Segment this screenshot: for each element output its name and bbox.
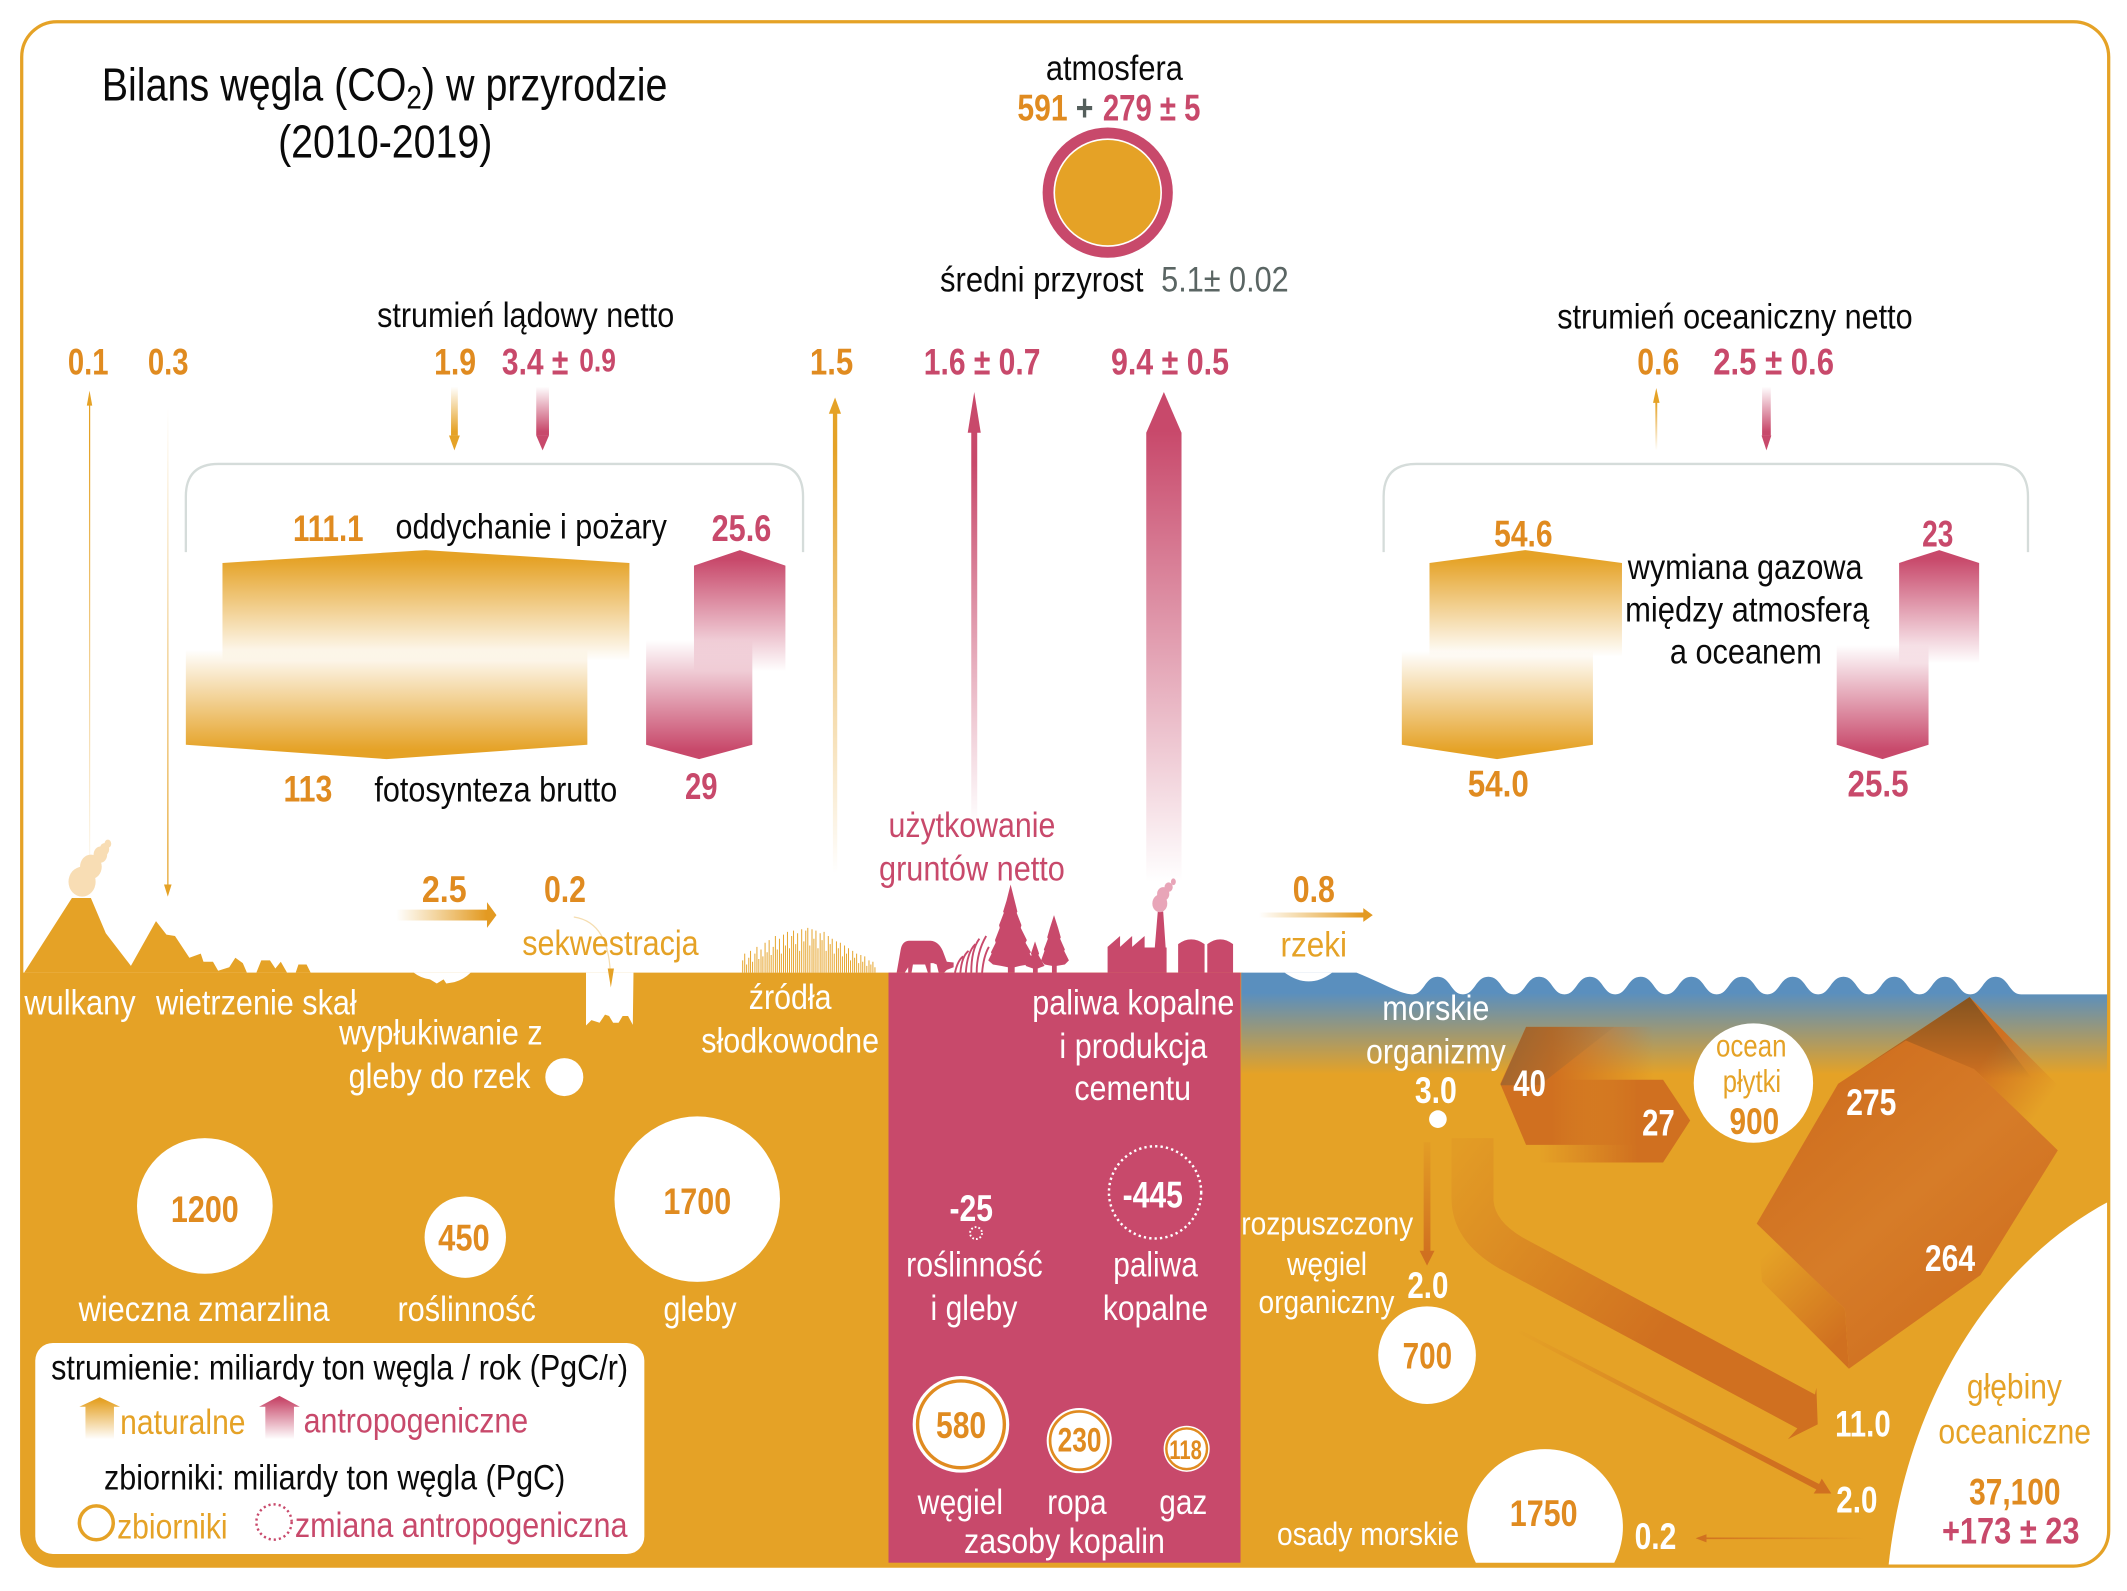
legend: antropogeniczne	[304, 1401, 528, 1440]
land surface labels: źródła	[749, 978, 832, 1017]
arrow: rivers 0.8	[1259, 908, 1373, 922]
legend: naturalne	[120, 1403, 246, 1442]
icon: volcano and mountains	[24, 840, 311, 973]
atmosphere-side land labels: użytkowanie	[889, 806, 1055, 845]
arrow: ocean release natural	[1402, 651, 1593, 759]
top flux numbers: 0.6	[1637, 341, 1679, 382]
reservoir: permafrost: wieczna zmarzlina	[78, 1290, 330, 1329]
reservoir: deep ocean labels: oceaniczne	[1938, 1412, 2091, 1451]
land block	[22, 973, 1243, 1567]
reservoir: permafrost: 1200	[171, 1189, 239, 1230]
atmosphere-side land labels: 0.8	[1293, 869, 1335, 910]
reservoir: dissolved organic carbon: 2.0	[1407, 1265, 1448, 1306]
atmosphere-side land labels: gruntów netto	[879, 849, 1065, 888]
reservoir: deep ocean labels: głębiny	[1967, 1368, 2062, 1407]
reservoir: shallow ocean: 900	[1730, 1101, 1779, 1142]
reservoir: coal: 580	[936, 1405, 986, 1446]
land exchange labels: fotosynteza brutto	[374, 771, 617, 810]
reservoir: marine sediments	[1277, 1449, 1623, 1563]
reservoir: deep ocean labels: +173 ± 23	[1942, 1511, 2080, 1552]
reservoir: vegetation	[397, 1196, 536, 1329]
land exchange labels	[284, 508, 771, 810]
ocean exchange labels: 23	[1922, 514, 1953, 555]
reservoir: marine sediments: osady morskie	[1277, 1516, 1459, 1552]
anthropogenic change: fossil fuels	[1103, 1146, 1208, 1328]
anthropogenic change: vegetation and soils: -25	[950, 1188, 993, 1229]
reservoir: marine sediments: 1750	[1510, 1493, 1578, 1534]
anthropogenic change: fossil fuels: kopalne	[1103, 1289, 1208, 1328]
land surface labels: gleby do rzek	[349, 1057, 531, 1096]
reservoir: gas: 118	[1169, 1434, 1202, 1465]
arrow: sediment burial 0.2	[1696, 1534, 1865, 1542]
arrow: ocean release anthropogenic	[1837, 645, 1929, 759]
arrow: shallow ocean to organisms 40	[1500, 1027, 1654, 1145]
marine organisms label and dot: morskie	[1382, 989, 1489, 1028]
marine organisms label and dot: 3.0	[1415, 1070, 1457, 1111]
ocean exchange labels: 25.5	[1848, 763, 1909, 804]
atmosphere reservoir: +	[1076, 88, 1093, 129]
marine organisms label and dot: organizmy	[1366, 1033, 1506, 1072]
title: ) w przyrodzie	[422, 58, 667, 110]
reservoir: dissolved organic carbon: węgiel	[1286, 1246, 1367, 1282]
top flux numbers: 1.6 ± 0.7	[924, 341, 1040, 382]
ocean flux numbers: 275	[1846, 1082, 1896, 1123]
icon: cow	[897, 941, 954, 973]
ocean exchange labels: 54.6	[1494, 514, 1553, 555]
anthropogenic change: vegetation and soils	[906, 1188, 1043, 1328]
anthropogenic change: vegetation and soils: i gleby	[931, 1289, 1018, 1328]
reservoir: soil leaching dot	[545, 1058, 583, 1096]
atmosphere-side land labels: rzeki	[1281, 925, 1347, 964]
top flux numbers: 1.5	[810, 341, 853, 382]
land surface labels: wypłukiwanie z	[338, 1014, 543, 1053]
arrow: respiration anthropogenic	[694, 550, 785, 671]
ocean flux numbers: 2.0	[1836, 1480, 1877, 1521]
atmosphere-side land labels: 2.5	[422, 869, 467, 910]
land exchange labels: oddychanie i pożary	[396, 508, 667, 547]
arrow: fossil fuels 9.4	[1146, 392, 1182, 882]
arrow: respiration natural	[222, 550, 629, 661]
atmosphere reservoir: 591	[1017, 88, 1068, 129]
ocean exchange labels: a oceanem	[1670, 632, 1822, 671]
top flux numbers: 0.1	[68, 341, 109, 382]
legend: zmiana antropogeniczna	[295, 1506, 628, 1545]
panel: surface reservoirs background	[22, 973, 2111, 1568]
reservoir: dissolved organic carbon: 700	[1403, 1336, 1452, 1377]
fossil panel labels: paliwa kopalne	[1032, 984, 1234, 1023]
legend	[35, 1343, 644, 1554]
ocean flux numbers: 11.0	[1835, 1404, 1891, 1445]
deep ocean reservoir	[1888, 1201, 2111, 1568]
ocean flux numbers: 27	[1642, 1102, 1675, 1143]
ocean flux numbers: 0.2	[1635, 1516, 1676, 1557]
arrow: ocean outgassing 0.6	[1653, 388, 1660, 450]
icon: large tree	[988, 884, 1034, 973]
top flux numbers: 9.4 ± 0.5	[1111, 341, 1229, 382]
reservoir: dissolved organic carbon: organiczny	[1259, 1284, 1395, 1320]
reservoir: dissolved organic carbon	[1241, 1205, 1476, 1404]
legend: zbiorniki: miliardy ton węgla (PgC)	[104, 1458, 565, 1497]
reservoir: shallow ocean: ocean	[1716, 1029, 1787, 1064]
anthropogenic change: vegetation and soils: roślinność	[906, 1245, 1043, 1284]
arrow: surface to deep ocean 264	[1757, 1040, 2058, 1369]
arrow: photosynthesis anthropogenic	[646, 640, 752, 759]
land surface labels: wulkany	[24, 984, 136, 1023]
reservoir: oil	[1047, 1408, 1112, 1522]
ocean exchange labels: 54.0	[1468, 763, 1529, 804]
icon: freshwater grass	[743, 928, 875, 973]
arrow: photosynthesis natural	[186, 650, 587, 759]
fossil panel labels: i produkcja	[1059, 1027, 1208, 1066]
reservoir: deep ocean labels: 37,100	[1969, 1471, 2061, 1512]
ocean exchange labels	[1468, 514, 1953, 804]
legend: zbiorniki	[117, 1507, 228, 1546]
panel: land exchange bracket	[186, 464, 803, 552]
top flux numbers	[68, 341, 1834, 382]
net land flux heading: strumień lądowy netto	[377, 296, 674, 335]
legend arrow: natural	[79, 1397, 120, 1439]
ocean flux numbers	[1513, 1063, 1976, 1557]
fossil panel labels	[1032, 984, 1234, 1108]
atmosphere reservoir: 5.1± 0.02	[1161, 261, 1289, 300]
anthropogenic change: fossil fuels: paliwa	[1113, 1245, 1198, 1284]
ocean exchange labels: między atmosferą	[1625, 590, 1870, 629]
icon: small tree	[1041, 915, 1069, 973]
icon: reeds	[955, 936, 989, 973]
reservoir: coal: węgiel	[917, 1483, 1003, 1522]
arrow: deep ocean to surface 275	[1838, 997, 2058, 1150]
arrow: land sink anthropogenic 3.4	[536, 387, 549, 450]
title: Bilans węgla (CO	[102, 58, 458, 110]
fossil panel labels: cementu	[1074, 1069, 1191, 1108]
arrow: freshwater outgassing 1.5	[829, 397, 841, 874]
reservoir: soils: gleby	[663, 1290, 737, 1329]
land exchange labels: 25.6	[712, 508, 771, 549]
top flux numbers: 3.4 ±	[502, 341, 568, 382]
reservoir: coal	[913, 1376, 1009, 1522]
title: 2	[406, 80, 422, 116]
reservoir: gas	[1159, 1426, 1210, 1522]
atmosphere reservoir: średni przyrost	[940, 261, 1144, 300]
reservoir: gas: gaz	[1159, 1483, 1207, 1522]
icon: silos	[1178, 939, 1233, 973]
atmosphere reservoir: 279 ± 5	[1103, 88, 1201, 129]
land exchange labels: 111.1	[293, 508, 364, 549]
land exchange labels: 29	[685, 766, 718, 807]
reservoir: permafrost	[78, 1138, 330, 1329]
top flux numbers: 0.9	[579, 343, 616, 379]
atmosphere reservoir: atmosfera	[1046, 49, 1183, 88]
arrow: ocean uptake anthropogenic	[1899, 550, 1979, 663]
atmosphere-side land labels	[422, 806, 1347, 964]
reservoir: soils	[614, 1116, 780, 1329]
arrow: land sink natural 1.9	[449, 387, 460, 450]
ocean block with waves	[1241, 973, 2111, 1568]
icon: tiny tree	[1026, 941, 1045, 973]
reservoir: oil: 230	[1058, 1421, 1101, 1459]
land surface labels	[24, 978, 879, 1096]
arrow: ocean uptake natural	[1429, 550, 1622, 657]
arrow: organisms to shallow ocean 27	[1538, 1080, 1690, 1163]
arrow: volcanoes 0.1	[87, 391, 92, 893]
arrow: organisms to DOC 2.0	[1420, 1142, 1435, 1266]
arrow: flux 2.0 to deep ocean	[1514, 1328, 1831, 1494]
title	[102, 58, 667, 167]
ocean flux numbers: 40	[1513, 1063, 1546, 1104]
land exchange labels: 113	[284, 769, 332, 810]
top flux numbers: 1.9	[434, 341, 476, 382]
top flux numbers: 2.5 ± 0.6	[1713, 341, 1834, 382]
land surface labels: wietrzenie skał	[155, 984, 357, 1023]
reservoir: dissolved organic carbon: rozpuszczony	[1241, 1205, 1414, 1241]
ocean flux numbers: 264	[1925, 1238, 1976, 1279]
legend arrow: anthropogenic	[259, 1396, 300, 1439]
reservoir: vegetation: 450	[438, 1218, 490, 1259]
reservoir: vegetation: roślinność	[397, 1290, 536, 1329]
reservoir: oil: ropa	[1047, 1483, 1107, 1522]
atmosphere-side land labels: sekwestracja	[522, 924, 699, 963]
sequestration pit	[586, 973, 633, 1026]
arrow: ocean sink 2.5	[1762, 387, 1771, 450]
icon: soil ditch	[414, 973, 471, 983]
arrow: leaching 2.5	[396, 902, 496, 928]
fossil reserves label: zasoby kopalin	[964, 1522, 1165, 1561]
reservoir: shallow ocean: płytki	[1723, 1064, 1781, 1099]
net ocean flux heading: strumień oceaniczny netto	[1557, 297, 1913, 336]
arrow: particle flux 11.0	[1451, 1138, 1818, 1439]
arrow: sequestration 0.2	[574, 917, 614, 988]
marine organisms label and dot	[1366, 989, 1506, 1128]
atmosphere reservoir	[940, 49, 1289, 300]
top flux numbers: 0.3	[148, 341, 189, 382]
land surface labels: słodkowodne	[701, 1022, 879, 1061]
atmosphere-side land labels: 0.2	[544, 869, 586, 910]
fossil fuels block	[889, 973, 1241, 1563]
reservoir: shallow ocean	[1694, 1023, 1813, 1143]
icon: river mouth	[1285, 973, 1332, 981]
ocean exchange labels: wymiana gazowa	[1627, 548, 1863, 587]
panel: ocean exchange bracket	[1384, 464, 2028, 552]
anthropogenic change: fossil fuels: -445	[1123, 1174, 1183, 1215]
arrow: weathering 0.3	[164, 407, 172, 897]
reservoir: soils: 1700	[663, 1181, 731, 1222]
arrow: land use 1.6	[968, 392, 981, 825]
reservoir: deep ocean labels	[1938, 1368, 2091, 1552]
icon: factory with chimney	[1108, 878, 1176, 973]
legend: strumienie: miliardy ton węgla / rok (PgC/r)	[51, 1349, 628, 1388]
title: (2010-2019)	[278, 115, 492, 167]
